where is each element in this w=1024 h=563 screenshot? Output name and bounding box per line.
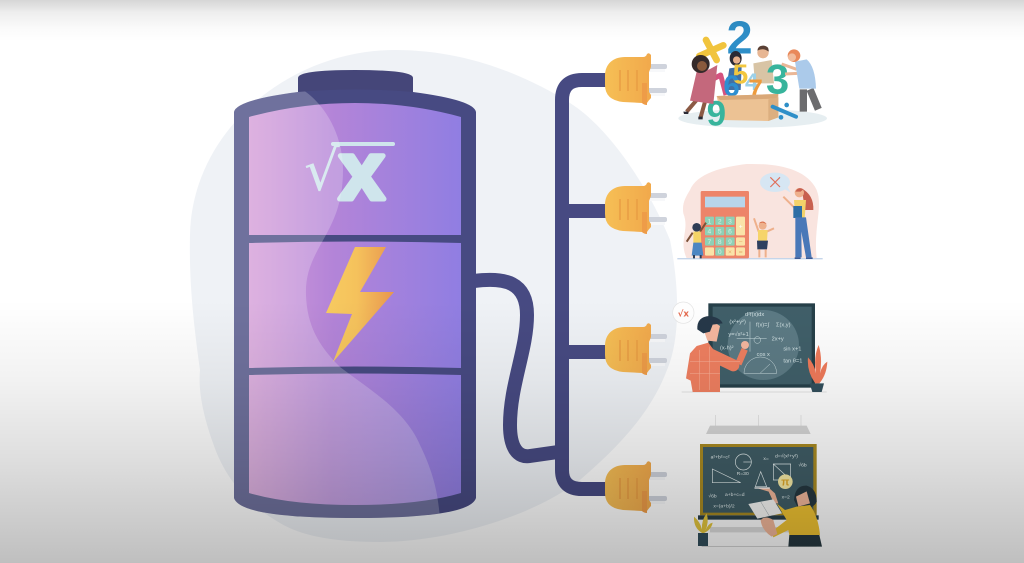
chalkboard: sin x+1 <box>783 347 801 353</box>
faint floor line <box>682 391 827 393</box>
translucent highlight wave <box>220 88 440 520</box>
chalkboard: x=(a+b)/2 <box>713 503 735 509</box>
chalkboard: tan θ=1 <box>783 359 802 365</box>
woman reading <box>748 486 822 547</box>
person: woman in red dress <box>683 55 717 119</box>
calculator: 4 <box>707 229 711 236</box>
chalkboard: y=√x²+1 <box>728 331 749 338</box>
illustration: man writing on chalkboard <box>673 302 827 392</box>
calculator: 1 <box>707 218 711 225</box>
battery cell: bottom <box>249 374 461 505</box>
chalkboard: f(x)=∫ <box>756 323 769 329</box>
calculator: 7 <box>707 239 711 246</box>
chalkboard: a+b+c=d <box>725 492 745 498</box>
battery <box>220 70 476 520</box>
square root badge: √x <box>678 308 689 319</box>
plug 4 <box>605 461 667 513</box>
calculator: + <box>739 224 743 231</box>
lightning bolt <box>326 247 394 362</box>
ground line <box>677 257 823 261</box>
square root of x symbol: x <box>339 126 385 217</box>
lower wall band <box>710 527 807 532</box>
chalkboard: a²+b²=c² <box>711 454 730 460</box>
chalkboard <box>698 444 819 520</box>
ceiling fixture <box>706 415 811 434</box>
number 1 <box>713 75 726 95</box>
distribution wire <box>562 80 610 489</box>
battery shell <box>234 90 476 518</box>
square root of x symbol: √ <box>304 139 340 204</box>
floor line <box>702 545 817 547</box>
child middle <box>754 218 774 257</box>
calculator: 3 <box>728 218 732 225</box>
chalkboard: (x-h)² <box>720 345 734 351</box>
power cable from battery to bus <box>474 280 558 456</box>
battery cell: middle <box>249 242 461 368</box>
person: man behind box <box>753 46 774 83</box>
number 7: 7 <box>748 73 763 103</box>
teacher <box>783 188 813 259</box>
illustration: giant calculator with teacher and children <box>677 164 823 259</box>
calculator: × <box>728 249 732 256</box>
plug 3 <box>605 323 667 375</box>
chalkboard: √6b <box>798 462 807 469</box>
calculator: = <box>739 249 743 256</box>
chalkboard: 2x+y <box>772 337 784 343</box>
calculator <box>701 191 749 258</box>
chalkboard: x= <box>763 456 769 462</box>
chalkboard: (x²+y²) <box>729 319 746 325</box>
pink blob <box>683 164 819 258</box>
background blob <box>190 50 677 542</box>
person: girl behind box <box>726 51 742 90</box>
illustration: children with numbers in a box <box>678 11 827 134</box>
pi bubble: π <box>781 476 789 488</box>
potted plant <box>808 345 827 392</box>
number 6: 6 <box>723 70 740 103</box>
person: man in blue shirt <box>782 49 818 112</box>
chalkboard: d=√(x²+y²) <box>775 452 798 459</box>
chalkboard: cos x <box>757 352 770 358</box>
ground shadow <box>678 109 827 128</box>
potted plant <box>694 513 713 546</box>
man in orange shirt <box>686 316 749 392</box>
calculator: − <box>739 239 743 246</box>
number 5: 5 <box>733 58 748 89</box>
battery terminal cap <box>298 70 413 96</box>
plug 2 <box>605 182 667 234</box>
calculator: 9 <box>728 239 732 246</box>
box <box>717 94 778 121</box>
square root of x symbol <box>304 126 393 217</box>
number 4: 4 <box>745 69 759 96</box>
battery cell: top <box>249 103 461 235</box>
square root badge <box>673 302 694 323</box>
calculator: 0 <box>718 249 722 256</box>
plus sign <box>699 40 723 60</box>
chalkboard: x=2 <box>782 494 790 500</box>
number 9: 9 <box>707 95 726 134</box>
chalkboard: R=30 <box>737 471 749 477</box>
number 2: 2 <box>727 11 753 63</box>
division sign <box>773 103 796 120</box>
plug 1 <box>605 53 667 105</box>
chalkboard: Σ(x,y) <box>776 323 791 329</box>
calculator: 6 <box>728 229 732 236</box>
speech bubble <box>760 173 791 193</box>
chalkboard: d²f(x)dx <box>745 312 764 318</box>
chalkboard: √6b <box>708 492 717 499</box>
child left <box>687 223 706 258</box>
calculator: 2 <box>718 218 722 225</box>
calculator: 5 <box>718 229 722 236</box>
illustration: woman with book at chalkboard <box>694 415 822 547</box>
number 3: 3 <box>766 55 789 102</box>
calculator: 8 <box>718 239 722 246</box>
chalkboard <box>708 303 815 388</box>
